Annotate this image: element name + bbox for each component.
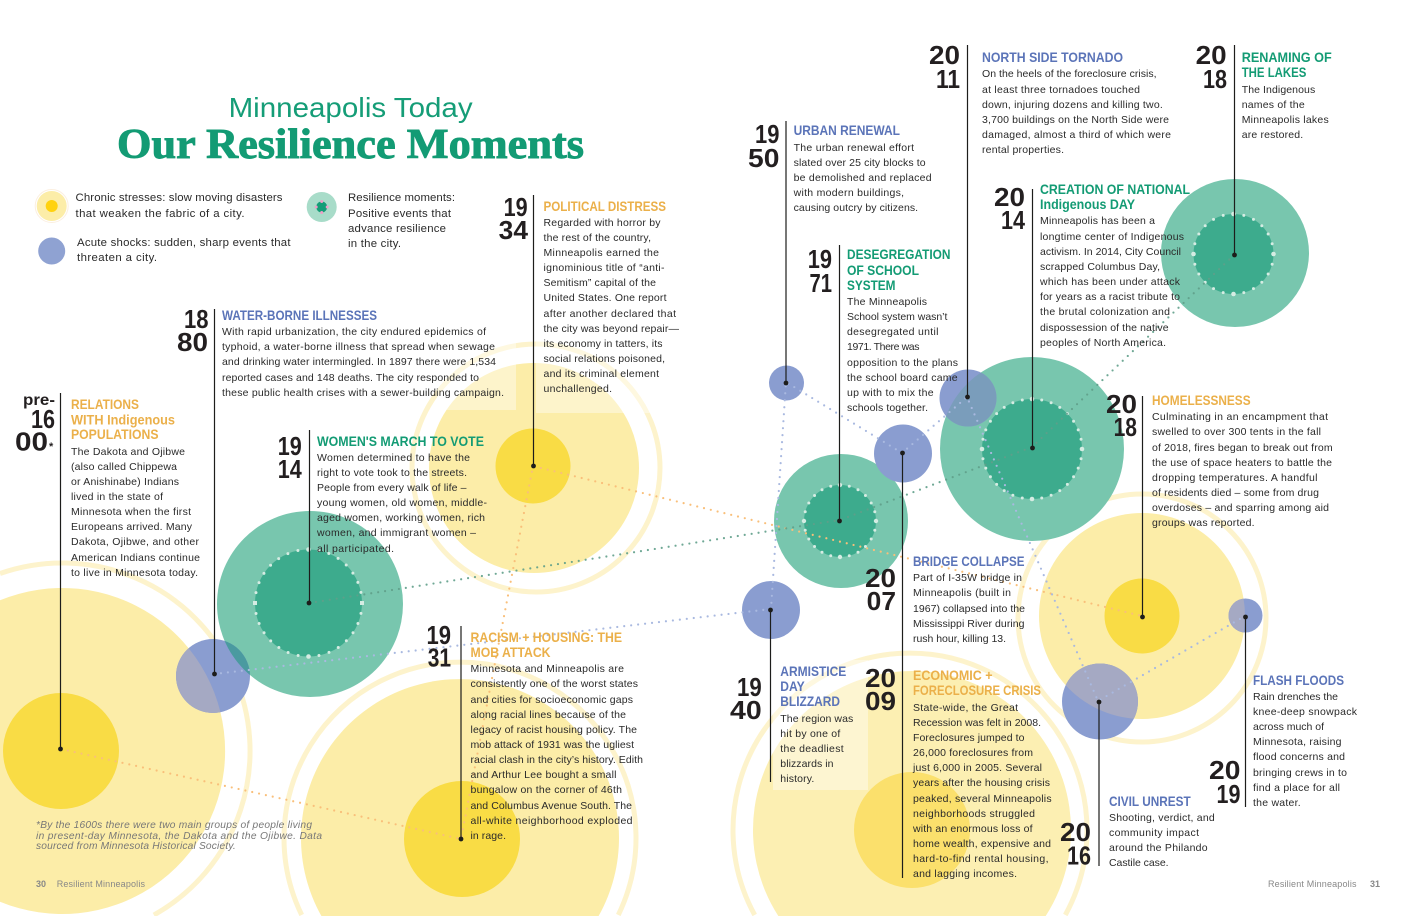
year: 34 — [499, 215, 529, 245]
year: 20 — [1060, 817, 1091, 847]
moment: 1931 racism and housing — [426, 620, 643, 842]
acute shock circle: 1950 — [769, 366, 804, 400]
footnote: in present-day Minnesota, the Dakota and the Ojibwe. Data — [36, 831, 322, 842]
timeline stem — [1140, 396, 1145, 619]
moment: 2011 north side tornado — [929, 40, 1171, 399]
body text: social relations poisoned, — [544, 353, 665, 365]
year: 20 — [994, 182, 1025, 212]
body text: With rapid urbanization, the city endured epidemics of — [222, 326, 486, 338]
body text: along racial lines because of the — [470, 709, 626, 721]
year — [994, 182, 1025, 235]
heading: CIVIL UNREST — [1109, 793, 1191, 809]
moment: 2019 flash floods — [1209, 615, 1358, 809]
year: 16 — [31, 404, 55, 434]
heading: DAY — [780, 678, 805, 694]
body text: home wealth, expensive and — [913, 838, 1051, 850]
year: 07 — [867, 586, 896, 616]
body text: Shooting, verdict, and — [1109, 812, 1215, 824]
timeline stem — [768, 608, 773, 782]
body text: schools together. — [847, 402, 928, 414]
year: 20 — [1106, 389, 1137, 419]
year: 00 — [15, 427, 48, 457]
moment: 2009 economic and foreclosure crisis — [865, 663, 1052, 880]
year: 19 — [426, 620, 451, 650]
acute shock circle: 1940 — [742, 581, 800, 639]
body text: legacy of racist housing policy. The — [470, 724, 637, 736]
body text: Minnesota when the first — [71, 506, 191, 518]
body text: young women, old women, middle- — [317, 497, 488, 509]
body text: Foreclosures jumped to — [913, 732, 1025, 744]
moment: 1914 women's march to vote — [278, 430, 488, 605]
icon: resilience moment — [307, 192, 337, 222]
moment: 1940 armistice day blizzard — [730, 608, 853, 785]
year — [426, 620, 451, 673]
body text: School system wasn’t — [847, 311, 947, 323]
body text: all participated. — [317, 543, 394, 555]
heading: DESEGREGATION — [847, 246, 950, 262]
body text: with an enormous loss of — [912, 823, 1033, 835]
body text: (also called Chippewa — [71, 461, 177, 473]
legend text: chronic stress: that weaken the fabric of a city. — [76, 208, 244, 220]
body text: flood concerns and — [1253, 751, 1345, 763]
green dotted connector — [309, 255, 1234, 603]
year: 19 — [737, 672, 762, 702]
body text — [847, 296, 958, 414]
heading: FORECLOSURE CRISIS — [913, 682, 1041, 698]
body text: the city was beyond repair— — [544, 323, 680, 335]
year — [1060, 817, 1091, 871]
timeline stem — [307, 430, 311, 605]
heading — [913, 667, 1041, 698]
legend text: chronic stress — [76, 192, 283, 220]
timeline stem — [900, 451, 905, 878]
body text: find a place for all — [1253, 782, 1340, 794]
timeline stem — [459, 626, 463, 841]
body text: of 2018, fires began to break out from — [1152, 442, 1333, 454]
body text: The Minneapolis — [847, 296, 927, 308]
title: Our Resilience Moments — [117, 122, 584, 168]
body text: knee-deep snowpack — [1253, 706, 1358, 718]
body text: to live in Minnesota today. — [71, 567, 198, 579]
title — [117, 92, 584, 168]
body text: neighborhoods struggled — [913, 808, 1035, 820]
year — [929, 40, 960, 94]
body text: and lagging incomes. — [913, 868, 1017, 880]
body text: Semitism” capital of the — [544, 277, 656, 289]
heading: MOB ATTACK — [470, 644, 550, 660]
year: 11 — [936, 64, 960, 94]
timeline stem — [212, 309, 217, 676]
body text — [793, 142, 932, 214]
body text: hard-to-find rental housing, — [913, 853, 1048, 865]
body text: typhoid, a water-borne illness that spread when sewage — [222, 341, 495, 353]
year — [748, 119, 779, 173]
year — [1209, 755, 1240, 809]
year — [865, 663, 896, 716]
body text: years after the housing crisis — [913, 777, 1050, 789]
heading: WITH Indigenous — [71, 412, 175, 428]
year: 20 — [865, 663, 896, 693]
chronic stress circle: pre-1600 — [0, 563, 250, 915]
body text: are restored. — [1242, 129, 1303, 141]
timeline stem — [1232, 45, 1237, 257]
moment: 2007 bridge collapse — [865, 451, 1025, 878]
body text: Minneapolis has been a — [1040, 215, 1155, 227]
resilience circle: 1971 — [774, 454, 908, 588]
heading: Indigenous DAY — [1040, 196, 1136, 212]
footer: left page: Resilient Minneapolis — [57, 879, 146, 889]
moment: pre-1600 relations — [15, 392, 200, 751]
body text: Rain drenches the — [1253, 691, 1338, 703]
body text: On the heels of the foreclosure crisis, — [982, 68, 1157, 80]
moment: 2018 renaming of the lakes — [1196, 40, 1332, 257]
body text: lived in the state of — [71, 491, 163, 503]
body text: Minnesota, raising — [1253, 736, 1342, 748]
body text: dropping temperatures. A handful — [1152, 472, 1318, 484]
icon: chronic stress — [35, 190, 68, 222]
body text — [1253, 691, 1358, 809]
year: pre- — [23, 392, 55, 409]
timeline stem — [531, 195, 536, 468]
body text: unchallenged. — [544, 383, 612, 395]
heading: RENAMING OF — [1242, 49, 1332, 65]
body text — [780, 713, 853, 785]
body text: and Columbus Avenue South. The — [470, 800, 632, 812]
body text: and Arthur Lee bought a small — [470, 769, 616, 781]
resilience circle: 2014 — [940, 357, 1124, 541]
body text: the rest of the country, — [544, 232, 651, 244]
heading: WOMEN'S MARCH TO VOTE — [317, 433, 484, 449]
body text: just 6,000 in 2005. Several — [912, 762, 1042, 774]
year: * — [49, 441, 54, 453]
footnote — [36, 820, 322, 852]
timeline stem — [1030, 189, 1035, 450]
body text: swelled to over 300 tents in the fall — [1152, 426, 1321, 438]
legend text: acute shock — [77, 237, 291, 264]
body text: across much of — [1253, 721, 1324, 733]
body text: Minnesota and Minneapolis are — [470, 663, 624, 675]
year — [808, 244, 832, 298]
resilience circle: 1914 — [217, 511, 403, 697]
heading — [780, 663, 846, 709]
body text: Part of I-35W bridge in — [913, 572, 1022, 584]
chronic stress circle: 1931 — [284, 662, 636, 916]
resilience circle: 2018 lakes — [1161, 179, 1309, 327]
body text: slated over 25 city blocks to — [794, 157, 926, 169]
body text: of residents died – some from drug — [1152, 487, 1319, 499]
body text: peoples of North America. — [1040, 337, 1166, 349]
body text — [982, 68, 1171, 156]
timeline stem — [58, 393, 63, 751]
body text: The urban renewal effort — [794, 142, 914, 154]
body text: names of the — [1242, 99, 1305, 111]
body text: bungalow on the corner of 46th — [470, 784, 622, 796]
orange dotted connector — [61, 466, 1142, 839]
year: 40 — [730, 695, 762, 725]
body text: dispossession of the native — [1040, 322, 1169, 334]
year — [1196, 40, 1227, 94]
heading: WATER-BORNE ILLNESSES — [222, 307, 377, 323]
body text: activism. In 2014, City Council — [1040, 246, 1181, 258]
body text: rush hour, killing 13. — [913, 633, 1006, 645]
body text: damaged, almost a third of which were — [982, 129, 1171, 141]
heading: FLASH FLOODS — [1253, 672, 1344, 688]
year — [1106, 389, 1137, 442]
acute shock circle: 1880 — [176, 639, 250, 713]
legend — [35, 190, 455, 264]
body text: the use of space heaters to battle the — [1152, 457, 1332, 469]
moment: 2016 civil unrest — [1060, 700, 1215, 871]
body text: the brutal colonization and — [1040, 306, 1170, 318]
body text: which has been under attack — [1039, 276, 1181, 288]
year: 18 — [1203, 64, 1227, 94]
body text: in rage. — [470, 830, 506, 842]
acute shock circle: 2011 — [940, 370, 996, 426]
heading: POPULATIONS — [71, 426, 158, 442]
footer: right page: 31 — [1370, 879, 1380, 889]
heading — [1242, 49, 1332, 80]
footnote: sourced from Minnesota Historical Society. — [36, 841, 236, 852]
timeline stem — [1243, 615, 1248, 807]
year — [15, 392, 55, 457]
body text: the deadliest — [780, 743, 844, 755]
heading: POLITICAL DISTRESS — [544, 198, 666, 214]
body text: be demolished and replaced — [794, 172, 932, 184]
year: 20 — [1196, 40, 1227, 70]
icon: acute shock — [38, 238, 65, 264]
chronic stress circle: 2009 — [733, 653, 1087, 916]
body text: 1971. There was — [847, 341, 920, 353]
body text: American Indians continue — [71, 552, 200, 564]
body text: around the Philando — [1109, 842, 1208, 854]
body text: Castile case. — [1109, 857, 1169, 869]
body text — [316, 452, 488, 555]
timeline stem — [965, 45, 970, 399]
body text: or Anishinabe) Indians — [71, 476, 179, 488]
year: 19 — [808, 244, 832, 274]
body text: Recession was felt in 2008. — [913, 717, 1041, 729]
body text: State-wide, the Great — [913, 702, 1018, 714]
body text: Mississippi River during — [913, 618, 1025, 630]
heading: HOMELESSNESS — [1152, 392, 1251, 408]
footnote: *By the 1600s there were two main groups of people living — [36, 820, 312, 831]
body text: 26,000 foreclosures from — [913, 747, 1033, 759]
legend text: resilience moments: Resilience moments: — [348, 192, 455, 204]
body text: the water. — [1253, 797, 1301, 809]
body text: longtime center of Indigenous — [1040, 231, 1184, 243]
year: 18 — [184, 304, 208, 334]
year: 19 — [278, 431, 302, 461]
body text: Minneapolis lakes — [1242, 114, 1329, 126]
body text — [544, 217, 680, 395]
body text: and its criminal element — [544, 368, 659, 380]
heading: BRIDGE COLLAPSE — [913, 553, 1024, 569]
body text: 3,700 buildings on the North Side were — [982, 114, 1169, 126]
body text — [912, 702, 1052, 880]
body text: desegregated until — [847, 326, 938, 338]
heading — [470, 629, 622, 660]
timeline stem — [837, 245, 842, 523]
body text — [222, 326, 504, 399]
chronic stress circle: 2018 homelessness — [1018, 494, 1266, 742]
legend text: chronic stress: Chronic stresses: slow moving disasters — [76, 192, 283, 204]
year — [865, 563, 896, 616]
body text: causing outcry by citizens. — [794, 202, 918, 214]
body text: racial clash in the city’s history. Edith — [470, 754, 643, 766]
timeline stem — [1097, 700, 1101, 866]
body text: Minneapolis earned the — [544, 247, 659, 259]
body text: and drinking water intermingled. In 1897 there were 1,534 — [222, 356, 496, 368]
body text: The region was — [780, 713, 853, 725]
acute shock circle: 2016 — [1062, 664, 1138, 740]
heading: CREATION OF NATIONAL — [1040, 181, 1190, 197]
year: 14 — [1001, 205, 1025, 235]
body text: Regarded with horror by — [544, 217, 661, 229]
title: Minneapolis Today — [229, 92, 473, 123]
body text: 1967) collapsed into the — [913, 603, 1025, 615]
body text: Culminating in an encampment that — [1152, 411, 1328, 423]
year — [730, 672, 762, 725]
year: 19 — [1216, 779, 1240, 809]
heading: RACISM + HOUSING: THE — [470, 629, 622, 645]
body text — [1039, 215, 1184, 349]
body text — [470, 663, 643, 842]
year — [177, 304, 208, 357]
heading: ARMISTICE — [780, 663, 846, 679]
body text: consistently one of the worst states — [470, 678, 638, 690]
heading — [71, 396, 175, 442]
body text: hit by one of — [780, 728, 840, 740]
moment: 1934 political distress — [499, 192, 680, 468]
moment: 1971 desegregation — [808, 244, 958, 523]
body text: community impact — [1109, 827, 1199, 839]
year: 20 — [929, 40, 960, 70]
year: 71 — [810, 268, 832, 298]
body text: right to vote took to the streets. — [317, 467, 467, 479]
translucent text backing boxes — [437, 308, 868, 790]
body text: after another declared that — [544, 308, 676, 320]
legend text: resilience moments: Positive events that — [348, 208, 452, 220]
chronic stress circle: 1934 — [412, 344, 660, 592]
heading: ECONOMIC + — [913, 667, 993, 683]
body text: bringing crews in to — [1253, 767, 1347, 779]
body text: Europeans arrived. Many — [71, 521, 193, 533]
heading: BLIZZARD — [780, 693, 840, 709]
body text: all-white neighborhood exploded — [470, 815, 633, 827]
year: 09 — [865, 686, 896, 716]
year: 19 — [504, 192, 528, 222]
blue dotted connector — [214, 382, 1245, 701]
acute shock circle: 2019 — [1228, 598, 1262, 632]
heading: THE LAKES — [1242, 64, 1306, 80]
footer: right page: Resilient Minneapolis — [1268, 879, 1357, 889]
year: 50 — [748, 143, 779, 173]
body text: down, injuring dozens and killing two. — [982, 99, 1163, 111]
body text: peaked, several Minneapolis — [913, 793, 1052, 805]
body text: with modern buildings, — [793, 187, 904, 199]
year: 16 — [1067, 841, 1091, 871]
body text: Dakota, Ojibwe, and other — [71, 536, 200, 548]
body text: Minneapolis (built in — [913, 587, 1011, 599]
heading: NORTH SIDE TORNADO — [982, 49, 1123, 65]
legend text: resilience moments — [348, 192, 455, 250]
legend text: resilience moments: advance resilience — [348, 223, 446, 235]
body text: blizzards in — [780, 758, 834, 770]
body text: overdoses – and sparring among aid — [1152, 502, 1329, 514]
year: 18 — [1114, 412, 1137, 442]
year: 14 — [278, 454, 302, 484]
body text: history. — [780, 773, 814, 785]
heading — [847, 246, 950, 293]
body text: up with to mix the — [847, 387, 934, 399]
body text: for years as a racist tribute to — [1040, 291, 1180, 303]
body text: The Indigenous — [1242, 84, 1315, 96]
body text: rental properties. — [982, 144, 1064, 156]
heading: URBAN RENEWAL — [794, 122, 900, 138]
year: 19 — [755, 119, 779, 149]
body text: The Dakota and Ojibwe — [71, 446, 185, 458]
body text — [1152, 411, 1333, 529]
legend text: acute shock: Acute shocks: sudden, sharp events that — [77, 237, 291, 249]
moment: 1880 water-borne illnesses — [177, 304, 504, 676]
moment: 2014 national Indigenous day — [994, 181, 1190, 450]
legend text: acute shock: threaten a city. — [77, 252, 157, 264]
year — [278, 431, 302, 484]
body text — [1242, 84, 1329, 141]
moment: 1950 urban renewal — [748, 119, 932, 385]
year: 80 — [177, 327, 208, 357]
footer: left page: 30 — [36, 879, 46, 889]
moment: 2018 homelessness — [1106, 389, 1333, 619]
heading: OF SCHOOL — [847, 262, 919, 278]
timeline stem — [784, 121, 788, 385]
body text: women, and immigrant women – — [316, 527, 476, 539]
body text: People from every walk of life – — [317, 482, 467, 494]
heading: SYSTEM — [847, 277, 896, 293]
heading: RELATIONS — [71, 396, 139, 412]
year: 20 — [1209, 755, 1240, 785]
acute shock circle: 2007 — [874, 424, 932, 482]
legend text: resilience moments: in the city. — [348, 238, 401, 250]
body text: these public health crises with a sewer-building campaign. — [222, 387, 504, 399]
body text: its economy in tatters, its — [544, 338, 662, 350]
year — [499, 192, 529, 245]
body text: reported cases and 148 deaths. The city responded to — [222, 372, 479, 384]
body text — [1109, 812, 1215, 869]
body text: scrapped Columbus Day, — [1040, 261, 1160, 273]
body text: opposition to the plans — [847, 357, 958, 369]
body text: mob attack of 1931 was the ugliest — [470, 739, 634, 751]
body text: aged women, working women, rich — [317, 512, 485, 524]
body text: Women determined to have the — [317, 452, 470, 464]
year: 20 — [865, 563, 896, 593]
body text: the school board came — [847, 372, 958, 384]
body text: groups was reported. — [1152, 517, 1255, 529]
body text — [913, 572, 1025, 645]
heading — [1040, 181, 1190, 212]
body text: United States. One report — [544, 292, 667, 304]
year: 31 — [428, 643, 451, 673]
body text: ignominious title of “anti- — [544, 262, 665, 274]
body text: and cities for socioeconomic gaps — [470, 694, 633, 706]
body text: at least three tornadoes touched — [982, 84, 1140, 96]
body text — [71, 446, 200, 579]
